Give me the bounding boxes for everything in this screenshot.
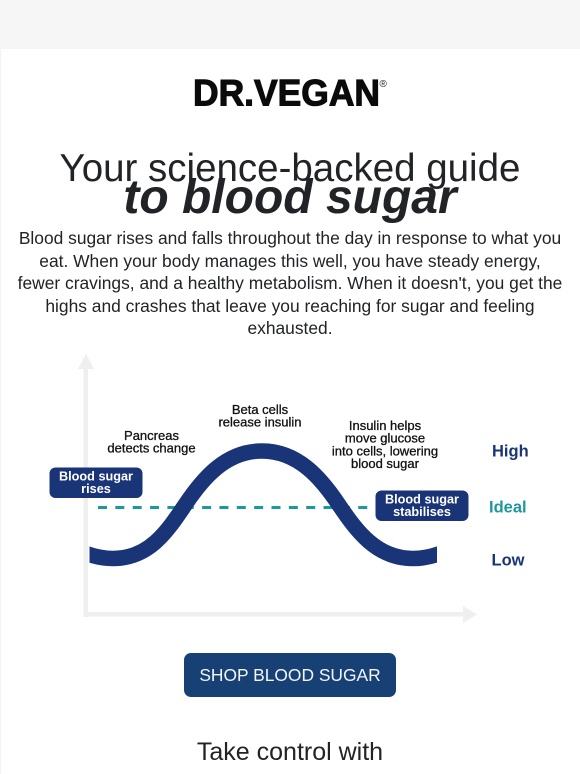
label: pancreas: Pancreas bbox=[124, 428, 179, 443]
label: ideal: Ideal bbox=[489, 498, 527, 516]
intro paragraph: Blood sugar rises and falls throughout the day in response to what you bbox=[19, 228, 561, 248]
intro paragraph: highs and crashes that leave you reaching for sugar and feeling bbox=[45, 296, 535, 316]
left page edge bbox=[0, 49, 1, 774]
label: insulin helps: Insulin helps bbox=[349, 418, 422, 433]
label: beta cells: Beta cells bbox=[232, 402, 289, 417]
button: shop blood sugar bbox=[184, 653, 396, 697]
logo: DR.VEGAN: DR.VEGAN bbox=[193, 72, 380, 114]
label: pancreas: detects change bbox=[107, 441, 196, 456]
label: insulin helps: move glucose bbox=[345, 431, 425, 446]
label: low: Low bbox=[492, 552, 525, 570]
y axis arrow bbox=[78, 354, 94, 617]
intro paragraph bbox=[18, 228, 562, 338]
x axis arrow bbox=[84, 606, 477, 623]
callout: blood sugar rises: rises bbox=[81, 482, 111, 496]
ideal dashed line bbox=[98, 506, 370, 509]
callout: blood sugar stabilises: Blood sugar bbox=[385, 492, 459, 506]
callout: blood sugar rises bbox=[50, 468, 142, 498]
heading line 2: to blood sugar bbox=[123, 170, 457, 224]
label: insulin helps: blood sugar bbox=[351, 456, 420, 471]
label: high: High bbox=[492, 442, 529, 460]
label: beta cells: release insulin bbox=[218, 415, 302, 430]
intro paragraph: fewer cravings, and a healthy metabolism. When it doesn't, you get the bbox=[18, 273, 562, 293]
top grey band bbox=[0, 0, 580, 49]
curve bbox=[75, 451, 451, 558]
callout: blood sugar stabilises bbox=[376, 490, 468, 521]
button: shop blood sugar: SHOP BLOOD SUGAR bbox=[199, 665, 381, 685]
heading line 1: Your science-backed guide bbox=[60, 147, 520, 190]
logo: DR.VEGAN: ® bbox=[380, 79, 388, 90]
intro paragraph: eat. When your body manages this well, you have steady energy, bbox=[39, 250, 541, 270]
intro paragraph: exhausted. bbox=[247, 318, 333, 338]
subheading: Take control with bbox=[197, 738, 383, 766]
level labels bbox=[489, 442, 529, 570]
callout: blood sugar rises: Blood sugar bbox=[59, 470, 133, 484]
chart: blood sugar curve bbox=[50, 354, 529, 623]
label: insulin helps: into cells, lowering bbox=[332, 443, 438, 458]
callout: blood sugar stabilises: stabilises bbox=[393, 505, 451, 519]
